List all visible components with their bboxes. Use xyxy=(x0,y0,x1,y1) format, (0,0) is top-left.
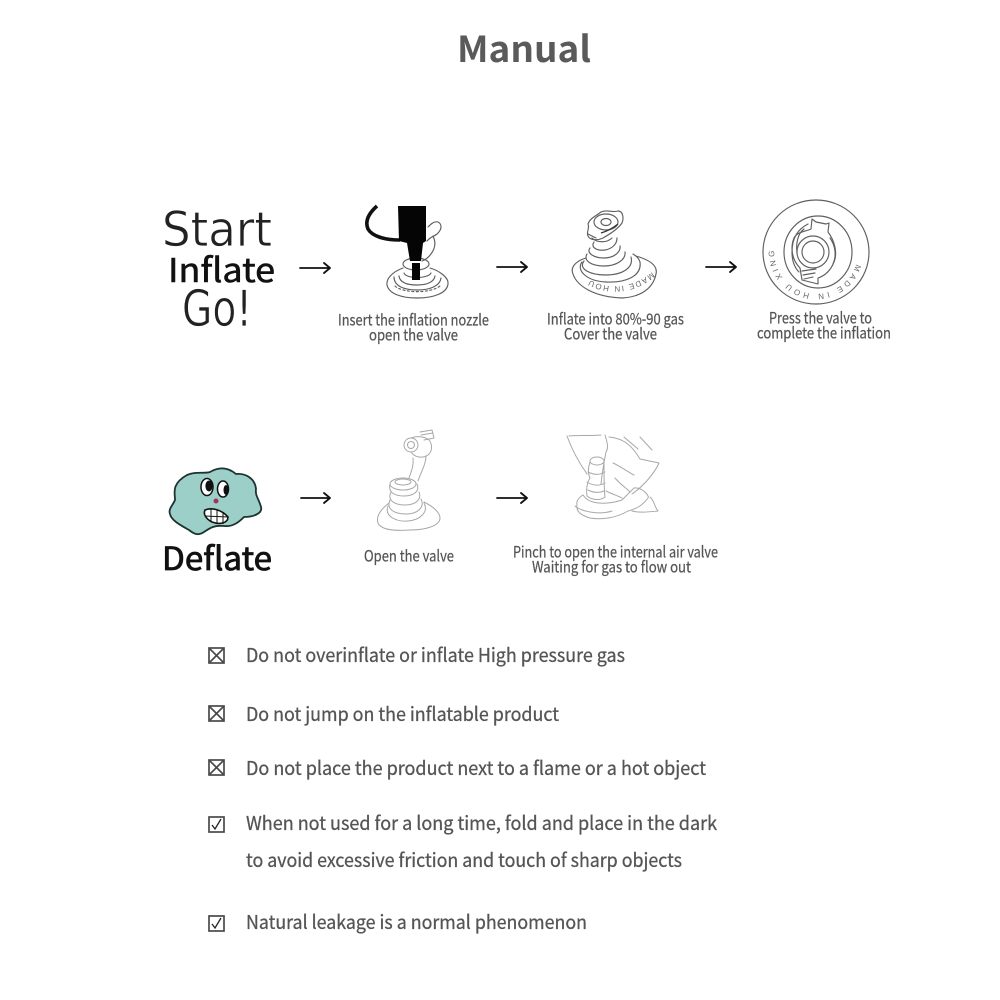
notice: storage xyxy=(209,809,717,873)
heading: start inflate go: Inflate xyxy=(168,244,275,292)
notice: storage: to avoid excessive friction and touch of sharp objects xyxy=(246,846,682,873)
heading: deflate: Deflate xyxy=(162,534,272,580)
notice: no jumping: Do not jump on the inflatable product xyxy=(246,700,559,727)
caption: step 2: Inflate into 80%-90 gas xyxy=(547,308,684,330)
title: Manual xyxy=(457,21,591,73)
icon: valve inflated, cover open: MADE IN HOU xyxy=(588,272,655,292)
icon: valve inflated, cover open xyxy=(572,210,657,299)
caption: pinch the valve xyxy=(513,540,718,578)
heading: start inflate go: Start xyxy=(162,202,272,258)
caption: step 3 xyxy=(757,306,891,344)
caption: step 1: open the valve xyxy=(369,324,458,346)
heading: start inflate go: Go! xyxy=(182,280,252,338)
notice: storage: When not used for a long time, fold and place in the dark xyxy=(246,809,717,836)
icon: hand pinching valve xyxy=(567,435,659,519)
caption: pinch the valve: Waiting for gas to flow out xyxy=(532,556,691,578)
caption: step 1 xyxy=(338,308,489,346)
notice: natural leakage: Natural leakage is a normal phenomenon xyxy=(246,908,587,935)
icon: valve open, tilted cap xyxy=(377,430,440,530)
notice: no flames: Do not place the product next to a flame or a hot object xyxy=(246,754,706,781)
arrow: start to step 1 xyxy=(300,263,330,273)
heading: start inflate go xyxy=(162,202,275,338)
icon: valve pressed closed, top view xyxy=(762,199,870,305)
caption: step 3: Press the valve to xyxy=(769,306,872,328)
caption: step 2 xyxy=(547,308,684,344)
caption: open the valve: Open the valve xyxy=(364,544,454,566)
arrow: step 2 to step 3 xyxy=(706,262,736,272)
icon: teal blob character xyxy=(170,468,261,534)
caption: step 3: complete the inflation xyxy=(757,322,891,344)
icon: nozzle inserted in valve xyxy=(367,206,448,298)
notice: no overinflate: Do not overinflate or inflate High pressure gas xyxy=(246,641,625,668)
caption: pinch the valve: Pinch to open the internal air valve xyxy=(513,540,718,562)
icon: valve pressed closed, top view: MADE IN HOU XING xyxy=(768,251,861,300)
caption: step 1: Insert the inflation nozzle xyxy=(338,308,489,330)
arrow: step 1 to step 2 (deflate) xyxy=(497,493,527,503)
arrow: step 1 to step 2 xyxy=(497,262,527,272)
caption: step 2: Cover the valve xyxy=(564,322,657,344)
arrow: deflate to step 1 xyxy=(301,493,330,503)
